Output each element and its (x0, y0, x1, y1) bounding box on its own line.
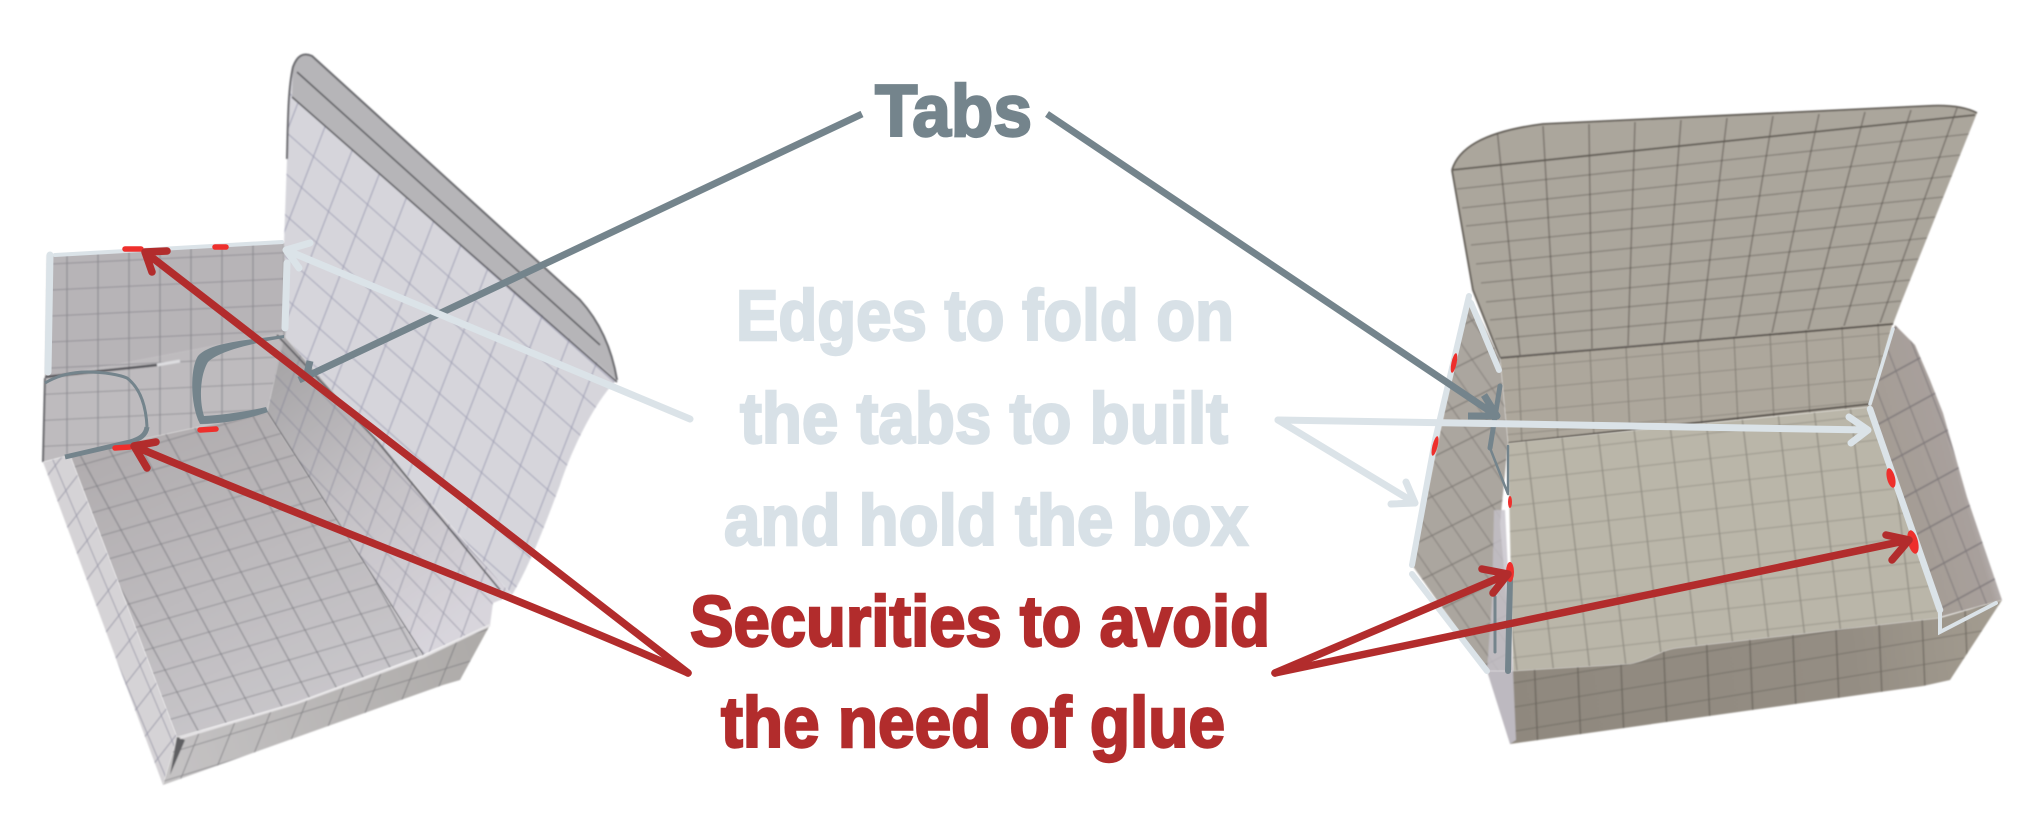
text block: fold edges: and hold the box (724, 482, 1248, 561)
right box: lid flap (1452, 106, 1977, 358)
text block: securities (690, 583, 1270, 763)
right box: left wall (1412, 296, 1513, 671)
left box: back walls (43, 243, 286, 462)
left box: fold edge highlights (48, 242, 287, 372)
arrow: edges to right box near side (1278, 420, 1415, 504)
left photo: opened paper box (43, 54, 617, 785)
text block: fold edges: the tabs to built (740, 380, 1228, 459)
right box: back wall (1500, 322, 1893, 443)
left box: front wall (163, 625, 490, 785)
left box: red security marks (115, 247, 226, 448)
right box: right wall (1870, 325, 2002, 617)
left box: lid flap (284, 54, 617, 595)
arrow: tabs to left box (299, 114, 862, 380)
right photo: opened paper box (1412, 106, 2002, 744)
arrow: edges to left box (286, 243, 690, 419)
arrow: securities to right box left side (1275, 569, 1508, 673)
text block: securities: Securities to avoid (690, 583, 1270, 662)
left box: floor (70, 412, 423, 737)
right box: floor (1508, 407, 1940, 671)
heading: Tabs: Tabs (875, 71, 1032, 152)
text block: fold edges: Edges to fold on (736, 277, 1234, 356)
right box: red security marks (1430, 353, 1921, 582)
left box: tab outlines (45, 335, 284, 457)
left box: left wall (43, 455, 177, 785)
right box: fold edge highlights (1412, 296, 1996, 671)
arrow: edges to right box far side (1278, 417, 1868, 443)
arrows: securities (134, 251, 1909, 673)
right box: tab outlines (1490, 386, 1510, 671)
text block: securities: the need of glue (721, 684, 1225, 763)
arrows: tabs (299, 114, 1497, 416)
arrows: fold edges (286, 243, 1868, 504)
arrow: securities to left box top (145, 251, 688, 673)
arrow: securities to right box right side (1275, 535, 1909, 673)
left box: right wall (267, 335, 512, 655)
arrow: securities to left box floor (134, 442, 688, 673)
text block: fold edges (724, 277, 1248, 561)
arrow: tabs to right box (1047, 114, 1497, 416)
right box: front wall (1487, 600, 2002, 744)
